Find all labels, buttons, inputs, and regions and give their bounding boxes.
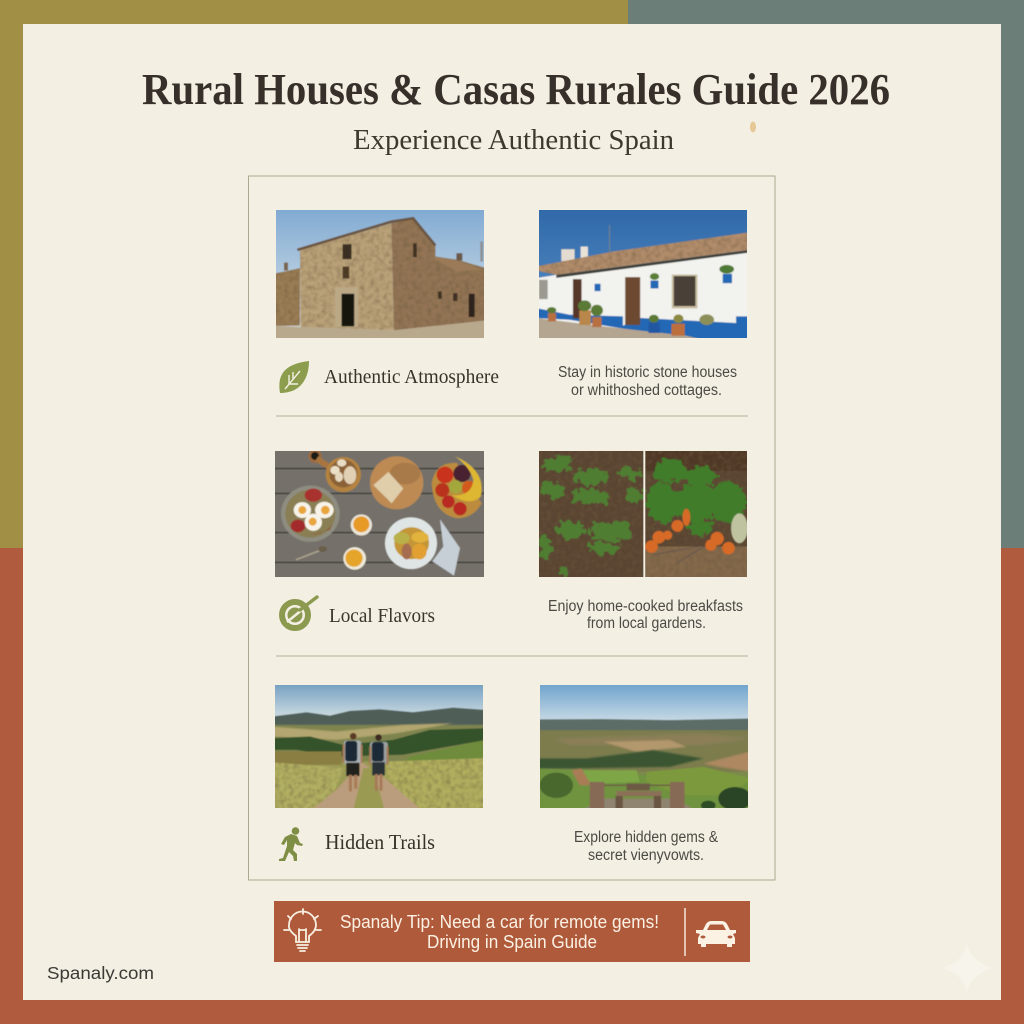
- heading: Local Flavors: Local Flavors: [329, 605, 435, 627]
- tip text: [340, 912, 659, 952]
- text: stay description: or whithoshed cottages.: [571, 382, 722, 399]
- text: explore description: [574, 829, 719, 864]
- photo: hikers on trail: [275, 685, 483, 808]
- text: breakfast description: from local gardens.: [587, 615, 706, 632]
- icon: light bulb: [284, 909, 321, 951]
- background: slate block: [628, 0, 1024, 548]
- brand name: Spanaly.com: [47, 963, 154, 983]
- text: stay description: [558, 364, 737, 399]
- main content panel: [248, 176, 775, 880]
- photo: stone house: [276, 210, 484, 338]
- photo: whitewashed cottage: [539, 210, 747, 338]
- icon: skillet and whisk: [282, 597, 317, 628]
- subtitle: Experience Authentic Spain: [353, 124, 674, 156]
- decorative sparkle: [943, 945, 992, 991]
- text: breakfast description: Enjoy home-cooked breakfasts: [548, 598, 743, 615]
- photo: valley viewpoint: [540, 685, 748, 808]
- background: olive block: [0, 0, 628, 548]
- paper stain: [750, 122, 756, 132]
- text: explore description: secret vienyvowts.: [588, 847, 704, 864]
- icon: hiker: [279, 827, 303, 861]
- photo: vegetable garden: [539, 451, 747, 577]
- text: explore description: Explore hidden gems &: [574, 829, 719, 846]
- icon: leaf: [279, 361, 309, 393]
- title: Rural Houses & Casas Rurales Guide 2026: [142, 65, 890, 114]
- text: breakfast description: [548, 598, 743, 632]
- heading: Authentic Atmosphere: Authentic Atmosphere: [324, 366, 499, 388]
- tip text: Spanaly Tip: Need a car for remote gems!: [340, 912, 659, 932]
- tip banner: [274, 901, 750, 962]
- icon: car: [696, 921, 736, 947]
- tip text: Driving in Spain Guide: [427, 932, 597, 952]
- background: terracotta block: [0, 548, 1024, 1024]
- photo: breakfast table: [275, 451, 484, 577]
- heading: Hidden Trails: Hidden Trails: [325, 830, 435, 854]
- text: stay description: Stay in historic stone houses: [558, 364, 737, 381]
